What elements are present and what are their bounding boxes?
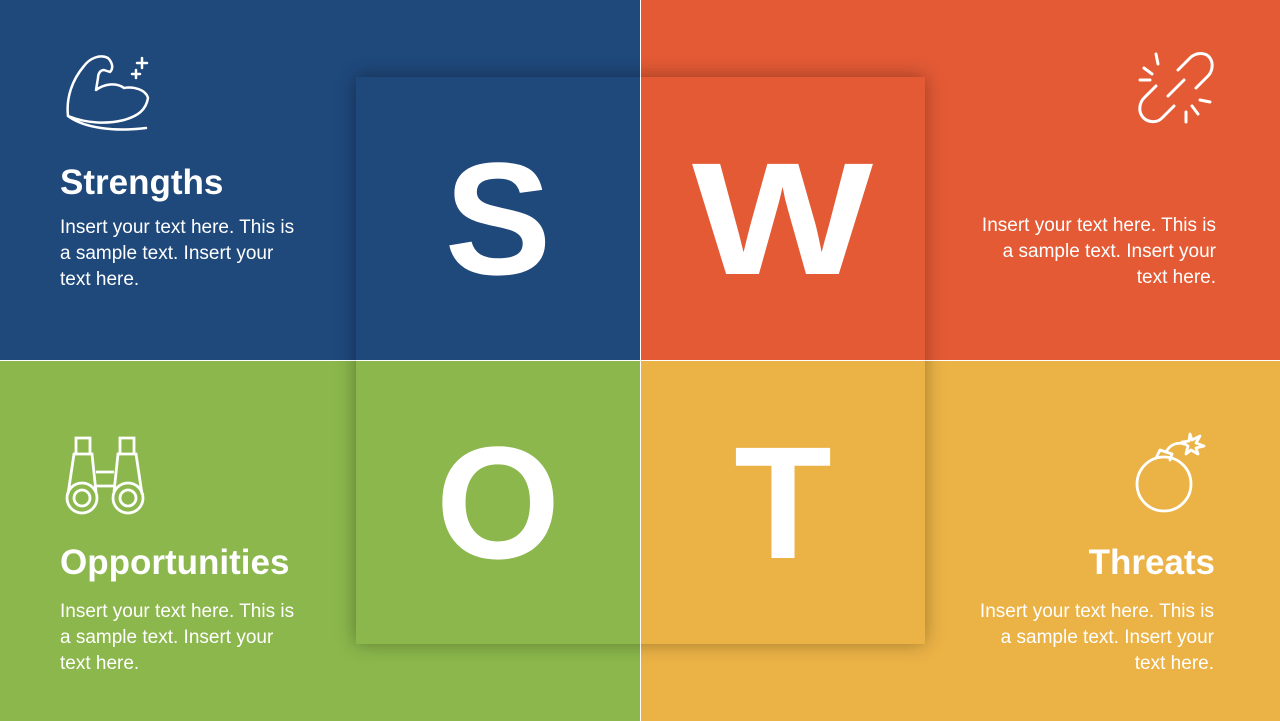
icon: flexed arm xyxy=(66,55,150,131)
square O: O xyxy=(436,412,560,592)
center squares group xyxy=(356,77,924,643)
icon: broken chain xyxy=(1138,52,1214,124)
heading: Opportunities: Opportunities xyxy=(60,543,289,582)
quadrant: threats xyxy=(641,361,1280,721)
square S xyxy=(356,77,640,360)
icon: bomb xyxy=(1136,432,1206,512)
text: opportunities: Insert your text here. This is a sample text. Insert your text here. xyxy=(60,601,294,674)
square W: W xyxy=(692,128,874,308)
square W xyxy=(641,77,925,360)
square O xyxy=(356,361,640,644)
quadrant: opportunities xyxy=(0,361,640,721)
square T xyxy=(641,361,925,644)
heading: Strengths: Strengths xyxy=(60,163,223,202)
text: threats: Insert your text here. This is a sample text. Insert your text here. xyxy=(980,601,1214,674)
quadrant: weaknesses xyxy=(641,0,1280,360)
square S: S xyxy=(445,128,551,308)
text: strengths: Insert your text here. This is a sample text. Insert your text here. xyxy=(60,217,294,290)
quadrant: strengths xyxy=(0,0,640,360)
icon: binoculars xyxy=(66,436,144,514)
heading: Threats: Threats xyxy=(1089,543,1215,582)
text: weaknesses: Insert your text here. This is a sample text. Insert your text here. xyxy=(982,215,1216,288)
divider lines xyxy=(640,0,641,720)
square T: T xyxy=(734,412,832,592)
